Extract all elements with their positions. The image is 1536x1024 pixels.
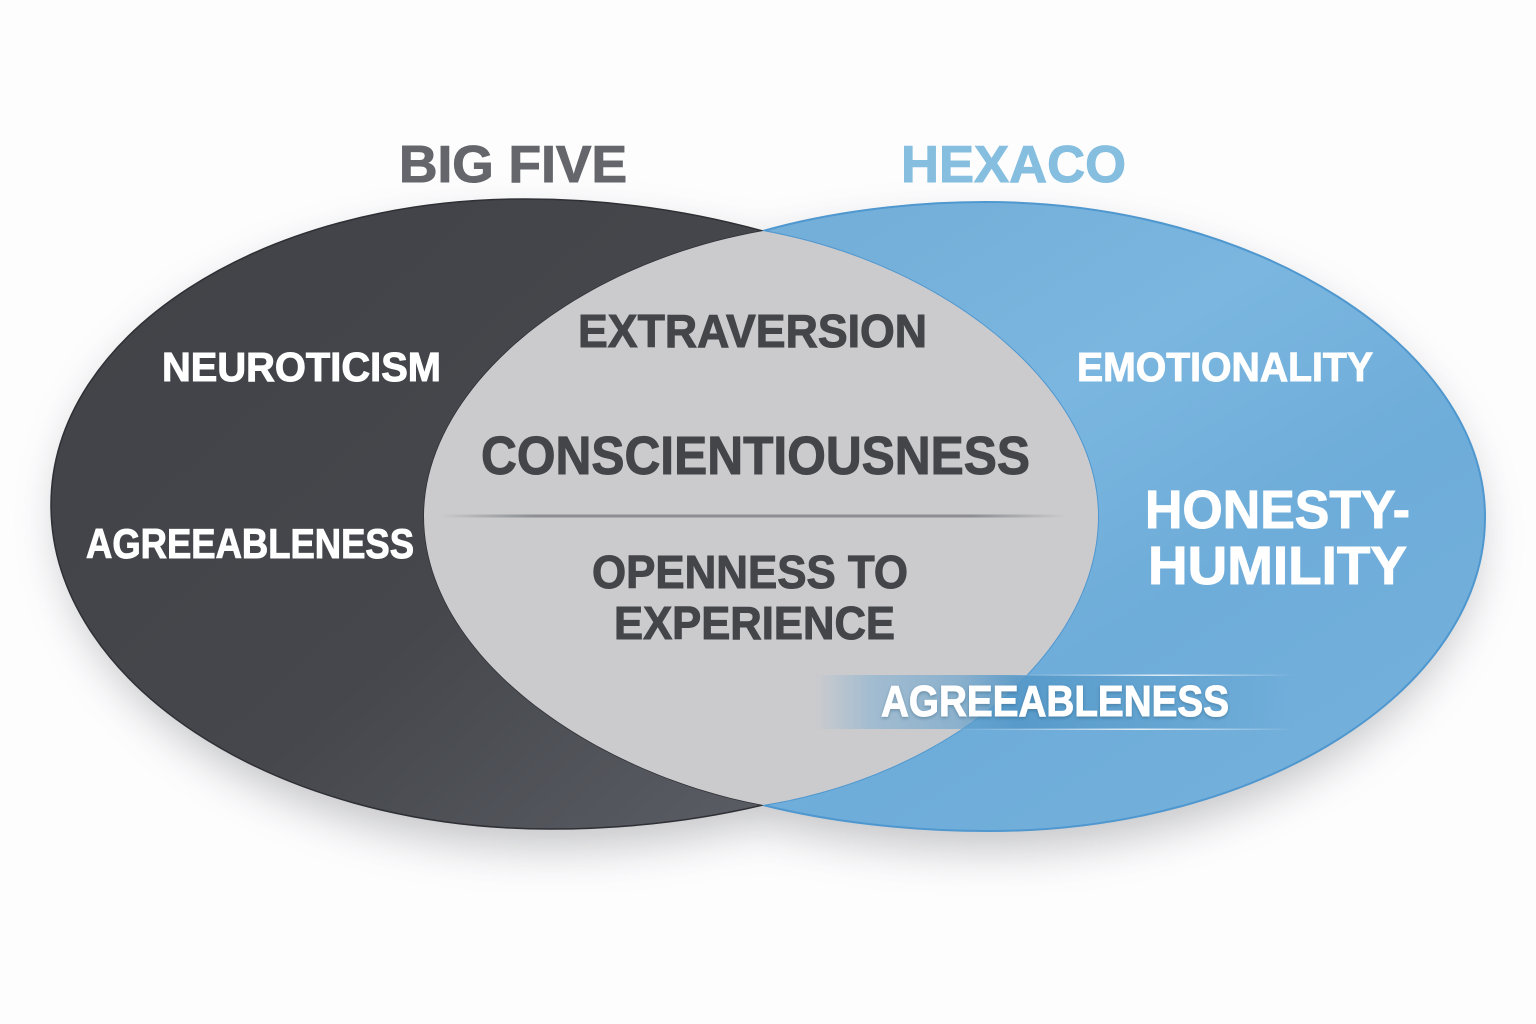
drop shadow beneath ovals: [60, 222, 1478, 850]
label: openness to experience: EXPERIENCE: [614, 597, 895, 649]
label: conscientiousness: CONSCIENTIOUSNESS: [481, 426, 1030, 486]
label: emotionality: EMOTIONALITY: [1077, 344, 1373, 390]
label: honesty-humility: [1145, 480, 1410, 596]
label: honesty-humility: HONESTY-: [1145, 480, 1410, 540]
label: extraversion: EXTRAVERSION: [578, 305, 927, 357]
label: openness to experience: OPENNESS TO: [592, 546, 908, 598]
divider line: [440, 514, 1065, 518]
big five oval: [51, 199, 763, 829]
label: neuroticism: NEUROTICISM: [162, 344, 441, 390]
overlap lens: [424, 231, 1098, 805]
label: agreeableness big five: AGREEABLENESS: [86, 520, 414, 567]
agreeableness band: AGREEABLENESS: [881, 677, 1229, 726]
label: honesty-humility: HUMILITY: [1148, 536, 1407, 596]
heading: big five: BIG FIVE: [399, 136, 627, 194]
label: openness to experience: [592, 546, 908, 649]
hexaco oval: [763, 202, 1485, 831]
heading: hexaco: HEXACO: [901, 136, 1126, 194]
